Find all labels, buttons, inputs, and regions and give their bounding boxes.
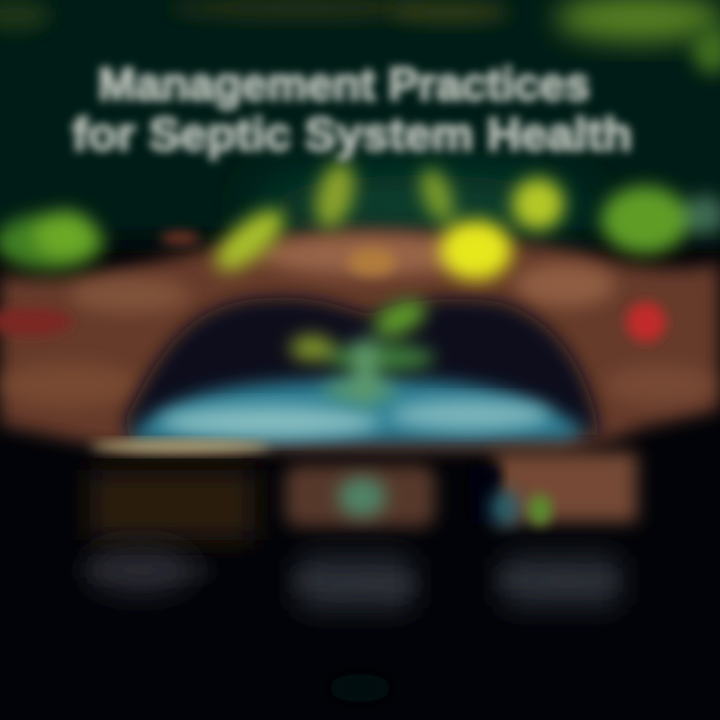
title bbox=[72, 58, 632, 160]
soil bank bbox=[0, 230, 720, 450]
card text: left bbox=[85, 546, 210, 594]
panel: left card bbox=[85, 470, 255, 594]
card text: center bbox=[295, 555, 415, 610]
panel: center card bbox=[285, 465, 435, 610]
central sprout bbox=[290, 293, 435, 405]
card text: right: Protect bbox=[500, 564, 616, 597]
surface plants bbox=[0, 157, 720, 281]
footer logo bbox=[328, 674, 392, 702]
title: for Septic System Health bbox=[72, 108, 632, 160]
red accents bbox=[0, 232, 666, 342]
title: Management Practices bbox=[98, 58, 590, 110]
water pool bbox=[130, 380, 585, 442]
card text: left: Inspect bbox=[90, 557, 210, 584]
card text: right bbox=[500, 555, 620, 607]
panel: right card bbox=[470, 452, 637, 607]
underground cavity bbox=[90, 298, 600, 454]
card text: center: Pump bbox=[295, 566, 415, 599]
